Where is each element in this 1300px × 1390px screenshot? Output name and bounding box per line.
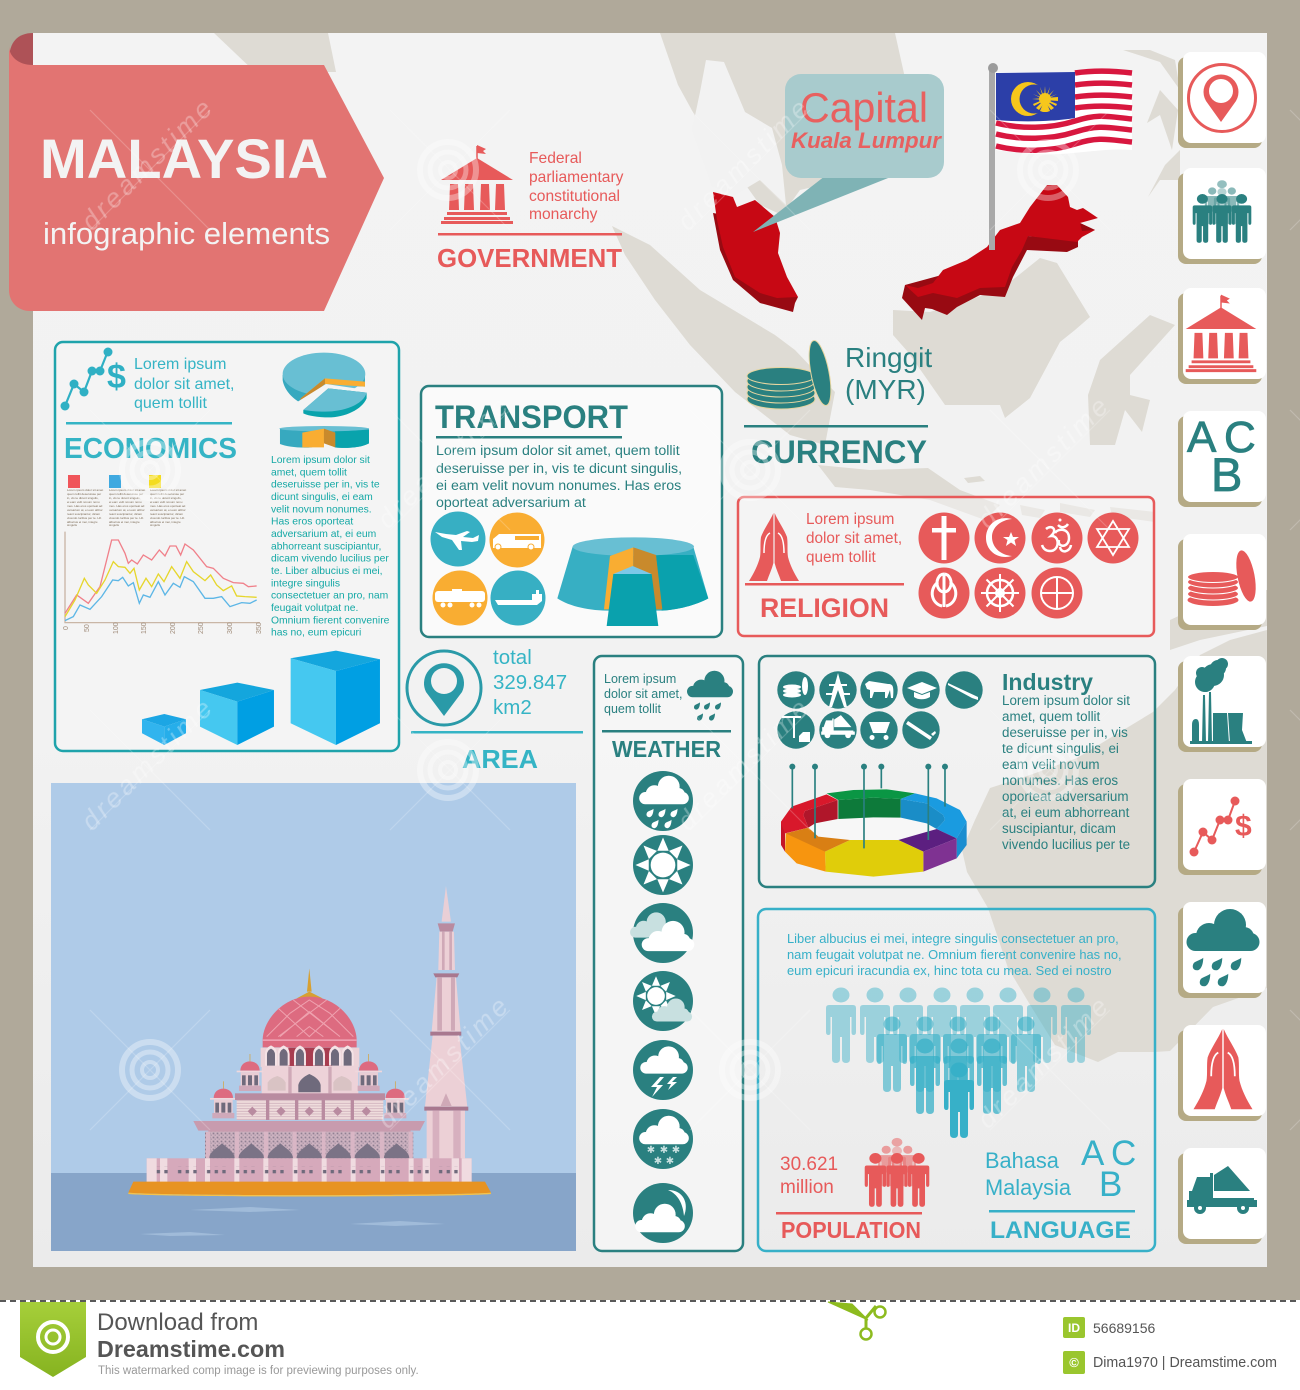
language name: Bahasa xyxy=(985,1148,1060,1173)
footer text: Download from xyxy=(97,1309,258,1336)
economics body text: te. Liber albucius ei mei, xyxy=(271,566,383,577)
icon: growth chart: $ xyxy=(1235,810,1252,843)
watermark overlay: dreamstime xyxy=(371,391,514,534)
base wall xyxy=(147,1158,472,1183)
chart legend: singulis xyxy=(67,523,78,527)
chart axis labels: 100 xyxy=(113,622,120,634)
economics body text: consectetuer an pro, nam xyxy=(271,591,388,602)
government section xyxy=(437,145,624,273)
upper arcades xyxy=(262,1045,358,1094)
icon: growth chart xyxy=(1190,796,1252,856)
icon: snow: ✱ xyxy=(672,1145,680,1156)
economics body text: feugait volutpat ne. xyxy=(271,603,358,614)
segment drum chart xyxy=(557,537,708,626)
industry text: oporteat adversarium xyxy=(1002,789,1129,804)
icon: scissors xyxy=(828,1302,886,1340)
icon: dump truck xyxy=(1187,1166,1257,1214)
platform xyxy=(128,1182,491,1196)
icon: rain cloud xyxy=(687,671,733,721)
chart axis labels: 0 xyxy=(63,626,70,630)
heading: industry: Industry xyxy=(1002,669,1093,695)
area value: 329.847 xyxy=(493,671,567,694)
icon: location pin xyxy=(1188,64,1256,132)
industry icons xyxy=(777,671,983,749)
chart legend: versarium at, ei eum abhor xyxy=(150,508,186,512)
image id xyxy=(1063,1317,1156,1338)
image id: 56689156 xyxy=(1093,1320,1156,1336)
icon: thunderstorm xyxy=(633,1040,693,1100)
industry text: nonumes. Has eros xyxy=(1002,773,1118,788)
capital label: Capital xyxy=(800,84,928,131)
icon: rain cloud xyxy=(1186,909,1260,986)
watermark overlay: dreamstime xyxy=(671,93,814,236)
government description: Federal xyxy=(529,150,582,167)
icon: praying hands xyxy=(1194,1029,1252,1109)
government description: parliamentary xyxy=(529,169,624,186)
chart axis labels: 150 xyxy=(141,622,148,634)
panel: industry xyxy=(759,656,1155,887)
chart axis labels: 350 xyxy=(256,622,263,634)
icon: tank train xyxy=(432,570,488,626)
pie chart xyxy=(283,353,367,417)
panel: economics xyxy=(55,342,399,751)
segment chart xyxy=(279,426,369,448)
currency name: Ringgit xyxy=(845,342,932,373)
icon: praying hands xyxy=(749,513,799,581)
watermark overlay: dreamstime xyxy=(971,991,1114,1134)
watermark overlay: dreamstime xyxy=(971,391,1114,534)
economics body text: Lorem ipsum dolor sit xyxy=(271,455,370,466)
map of south-east Asia xyxy=(214,33,1267,1062)
chart legend: reant suscipiantur, dicam xyxy=(150,512,184,516)
chart legend: quem tollit deseruisse per xyxy=(150,492,184,496)
economics body text: Has eros oporteat xyxy=(271,517,353,528)
chart legend: reant suscipiantur, dicam xyxy=(109,512,143,516)
industry text: deseruisse per in, vis xyxy=(1002,725,1128,740)
industry text: vivendo lucilius per te xyxy=(1002,837,1130,852)
icon: bus xyxy=(490,512,544,568)
weather text: Lorem ipsum xyxy=(604,672,676,686)
chart legend: mes. Has eros oporteat ad xyxy=(150,504,186,508)
chart legend: reant suscipiantur, dicam xyxy=(67,512,101,516)
population text: eum epicuri iracundia ex, hinc tota cu mea. Sed ei nostro xyxy=(787,963,1112,978)
economics body text: integre singulis xyxy=(271,578,340,589)
icon: map pin xyxy=(407,651,481,725)
chart legend: vivendo lucilius per te. Lib xyxy=(67,516,102,520)
industry text: te dicunt singulis, ei xyxy=(1002,741,1119,756)
callout: capital xyxy=(753,74,944,232)
chart legend: quem tollit deseruisse per xyxy=(67,492,101,496)
industry text: suscipiantur, dicam xyxy=(1002,821,1116,836)
industry text: Lorem ipsum dolor sit xyxy=(1002,693,1130,708)
capital name: Kuala Lumpur xyxy=(791,128,942,153)
icon: letters ABC: C xyxy=(1111,1134,1136,1173)
population value: million xyxy=(780,1177,834,1198)
transport text: ei eam velit novum nonumes. Has eros xyxy=(436,478,681,494)
dome xyxy=(261,968,359,1067)
icon: snow: ✱ xyxy=(666,1156,674,1167)
panel: transport xyxy=(421,386,722,637)
chart legend: versarium at, ei eum abhor xyxy=(109,508,145,512)
industry text: at, ei eum abhorreant xyxy=(1002,805,1130,820)
icon: ABC letters: A xyxy=(1187,413,1217,462)
icon: partly sunny xyxy=(633,971,693,1031)
population text: Liber albucius ei mei, integre singulis consectetuer an pro, xyxy=(787,931,1119,946)
government description: monarchy xyxy=(529,206,598,223)
icon: sun xyxy=(633,835,693,895)
chart legend: ei eam velit novum nonu xyxy=(150,500,183,504)
population text: nam feugait volutpat ne. Omnium fierent convenire has no, xyxy=(787,947,1122,962)
chart legend: Lorem ipsum dolor sit amet xyxy=(109,488,145,492)
icon: dreamstime ribbon xyxy=(20,1302,86,1377)
chart legend: Lorem ipsum dolor sit amet xyxy=(67,488,103,492)
heading: language: LANGUAGE xyxy=(990,1217,1131,1244)
title: Malaysia: MALAYSIA xyxy=(40,127,328,190)
chart legend: mes. Has eros oporteat ad xyxy=(67,504,103,508)
chart legend: singulis xyxy=(109,523,120,527)
chart legend: ei eam velit novum nonu xyxy=(109,500,142,504)
transport text: Lorem ipsum dolor sit amet, quem tollit xyxy=(436,443,680,459)
icon: growth chart with dollar xyxy=(60,348,126,410)
chart legend: in, vis te dicunt singulis, xyxy=(150,496,182,500)
heading: weather: WEATHER xyxy=(612,736,721,762)
icon: airplane xyxy=(430,512,486,566)
chart legend: versarium at, ei eum abhor xyxy=(67,508,103,512)
icon: rain xyxy=(633,771,693,831)
icon: building xyxy=(1186,295,1256,372)
industry text: eam velit novum xyxy=(1002,757,1100,772)
panel: weather xyxy=(594,656,743,1251)
icon: ABC letters: C xyxy=(1224,413,1256,462)
sidebar: icon cards xyxy=(1178,52,1266,1244)
map: peninsular Malaysia xyxy=(713,192,798,312)
author credit: Dima1970 | Dreamstime.com xyxy=(1093,1355,1277,1371)
chart legend: albucius ei mei, integre xyxy=(150,520,181,524)
economics body text: dicunt singulis, ei eam xyxy=(271,492,373,503)
chart legend: vivendo lucilius per te. Lib xyxy=(109,516,144,520)
chart axis labels: 300 xyxy=(227,622,234,634)
economics body text: has no, eum epicuri xyxy=(271,628,361,639)
icon: coins xyxy=(1188,549,1259,606)
icon: night cloud xyxy=(633,1183,693,1243)
watermark overlay: dreamstime xyxy=(671,693,814,836)
language name: Malaysia xyxy=(985,1175,1072,1200)
icon: snow: ✱ xyxy=(654,1156,662,1167)
economics intro text: Lorem ipsum xyxy=(134,356,226,373)
flagpole xyxy=(988,63,998,250)
government description: constitutional xyxy=(529,188,620,205)
small domes xyxy=(210,1054,409,1118)
footer brand: Dreamstime.com xyxy=(97,1336,285,1362)
chart legend: quem tollit deseruisse per xyxy=(109,492,143,496)
heading: currency: CURRENCY xyxy=(751,434,927,470)
title banner xyxy=(9,33,384,311)
footer note: This watermarked comp image is for previewing purposes only. xyxy=(98,1365,419,1377)
icon: government building xyxy=(441,145,513,224)
chart legend: albucius ei mei, integre xyxy=(109,520,140,524)
economics body text: abhorreant suscipiantur, xyxy=(271,541,381,552)
economics intro text: quem tollit xyxy=(134,395,207,412)
icon: snow xyxy=(633,1109,693,1169)
main terraces xyxy=(193,1093,425,1159)
industry text: amet, quem tollit xyxy=(1002,709,1101,724)
population value: 30.621 xyxy=(780,1154,838,1175)
icon: growth chart with dollar: $ xyxy=(107,358,126,396)
economics body text: amet, quem tollit xyxy=(271,467,347,478)
area value: total xyxy=(493,646,532,669)
heading: transport: TRANSPORT xyxy=(435,399,628,435)
heading: religion: RELIGION xyxy=(760,593,889,623)
icon: cloudy xyxy=(630,903,694,963)
heading: population: POPULATION xyxy=(781,1217,921,1243)
currency name: (MYR) xyxy=(845,374,926,405)
economics body text: deseruisse per in, vis te xyxy=(271,480,380,491)
chart legend: in, vis te dicunt singulis, xyxy=(67,496,99,500)
ring chart xyxy=(781,764,967,877)
heading: economics: ECONOMICS xyxy=(64,433,237,465)
transport text: deseruisse per in, vis te dicunt singulis, xyxy=(436,461,682,477)
3D cube chart xyxy=(142,651,380,745)
chart legend: mes. Has eros oporteat ad xyxy=(109,504,145,508)
icons: religious symbols xyxy=(918,512,1138,618)
economics intro text: dolor sit amet, xyxy=(134,376,234,393)
icon: letters ABC: A xyxy=(1081,1134,1105,1173)
map: east Malaysia xyxy=(902,185,1098,320)
icon: snow: ✱ xyxy=(660,1145,668,1156)
author credit xyxy=(1063,1351,1277,1374)
area value: km2 xyxy=(493,696,532,719)
currency section xyxy=(744,339,932,470)
icon: ship xyxy=(490,570,546,626)
economics body text: velit novum nonumes. xyxy=(271,504,372,515)
economics body text: adversarium at, ei eum xyxy=(271,529,376,540)
chart legend xyxy=(67,475,186,527)
area section xyxy=(407,646,583,774)
chart axis labels: 50 xyxy=(84,624,91,632)
chart legend: vivendo lucilius per te. Lib xyxy=(150,516,185,520)
religion text: dolor sit amet, xyxy=(806,530,902,547)
religion text: quem tollit xyxy=(806,549,876,566)
economics body text: dicam vivendo lucilius per xyxy=(271,554,389,565)
flag of Malaysia xyxy=(988,63,1132,250)
icon: snow: ✱ xyxy=(647,1145,655,1156)
heading: government: GOVERNMENT xyxy=(437,243,622,273)
minaret xyxy=(424,886,468,1159)
chart legend: albucius ei mei, integre xyxy=(67,520,98,524)
panel: religion xyxy=(738,497,1154,636)
chart legend: Lorem ipsum dolor sit amet xyxy=(150,488,186,492)
icon: letters ABC: B xyxy=(1099,1165,1122,1204)
icon: ABC letters: B xyxy=(1211,448,1242,501)
chart legend: singulis xyxy=(150,523,161,527)
watermark overlay: dreamstime xyxy=(75,93,218,236)
icon: people group xyxy=(865,1138,929,1207)
religion text: Lorem ipsum xyxy=(806,511,894,528)
chart axis labels: 200 xyxy=(170,622,177,634)
icon: people xyxy=(1193,180,1251,243)
illustration: Putra mosque xyxy=(51,783,576,1251)
watermark overlay: dreamstime xyxy=(371,991,514,1134)
people chart xyxy=(826,988,1091,1138)
author credit: © xyxy=(1069,1355,1079,1370)
weather text: dolor sit amet, xyxy=(604,687,683,701)
line chart xyxy=(65,532,260,623)
transport text: oporteat adversarium at xyxy=(436,495,586,511)
weather text: quem tollit xyxy=(604,702,661,716)
icon: factory xyxy=(1190,658,1252,744)
heading: area: AREA xyxy=(462,744,538,774)
subtitle: infographic elements xyxy=(43,216,330,251)
chart axis labels xyxy=(63,622,263,634)
chart legend: ei eam velit novum nonu xyxy=(67,500,100,504)
economics body text: Omnium fierent convenire xyxy=(271,615,390,626)
panel: population and language xyxy=(758,909,1155,1251)
chart legend: in, vis te dicunt singulis, xyxy=(109,496,141,500)
icon: coins xyxy=(747,339,835,409)
chart axis labels: 250 xyxy=(198,622,205,634)
image id: ID xyxy=(1068,1321,1080,1335)
watermark overlay: dreamstime xyxy=(75,693,218,836)
footer xyxy=(0,1300,1300,1390)
